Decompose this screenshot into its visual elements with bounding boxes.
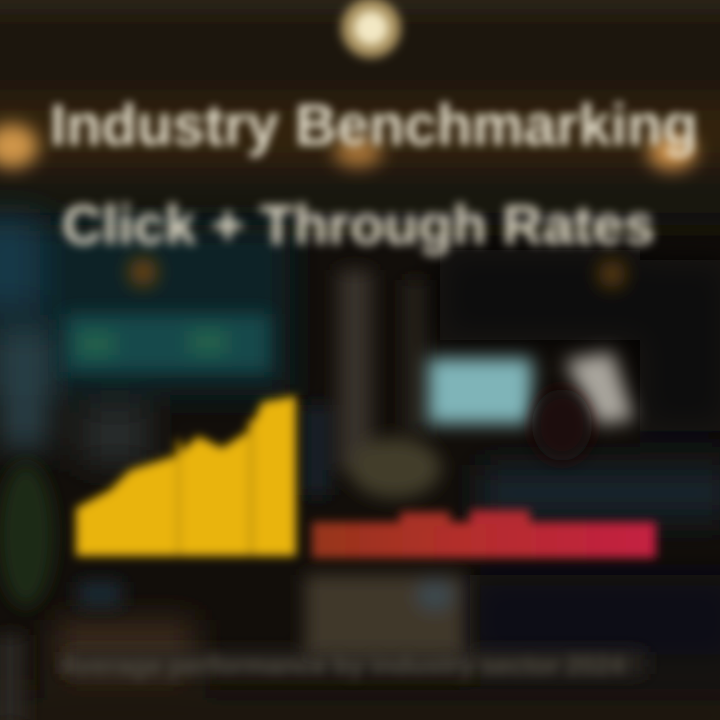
- pale blue screen: [428, 358, 532, 424]
- bottom caption: Average performance by industry sector 2024: [60, 650, 624, 680]
- left wall light: [0, 124, 38, 168]
- ceiling lamp: [341, 0, 401, 58]
- left amber lamp: [129, 258, 157, 286]
- teal screen panel: [65, 314, 270, 372]
- centre column: [305, 270, 441, 498]
- right wall light: [648, 134, 696, 170]
- plant: [0, 463, 54, 720]
- ceiling band: [0, 0, 720, 225]
- centre wall light: [334, 137, 382, 167]
- paper on right: [566, 352, 634, 424]
- title line 2: Click + Through Rates: [62, 193, 655, 256]
- table: [65, 575, 645, 674]
- yellow bar chart: [76, 396, 296, 556]
- seated person head: [532, 389, 592, 461]
- red text bar: [312, 510, 656, 558]
- title line 1: Industry Benchmarking: [50, 93, 698, 158]
- right dark wall: [440, 250, 720, 520]
- bar gaps: [176, 440, 181, 556]
- floor: [0, 575, 720, 720]
- left blue wall: [0, 215, 290, 465]
- right amber lamp: [598, 260, 626, 288]
